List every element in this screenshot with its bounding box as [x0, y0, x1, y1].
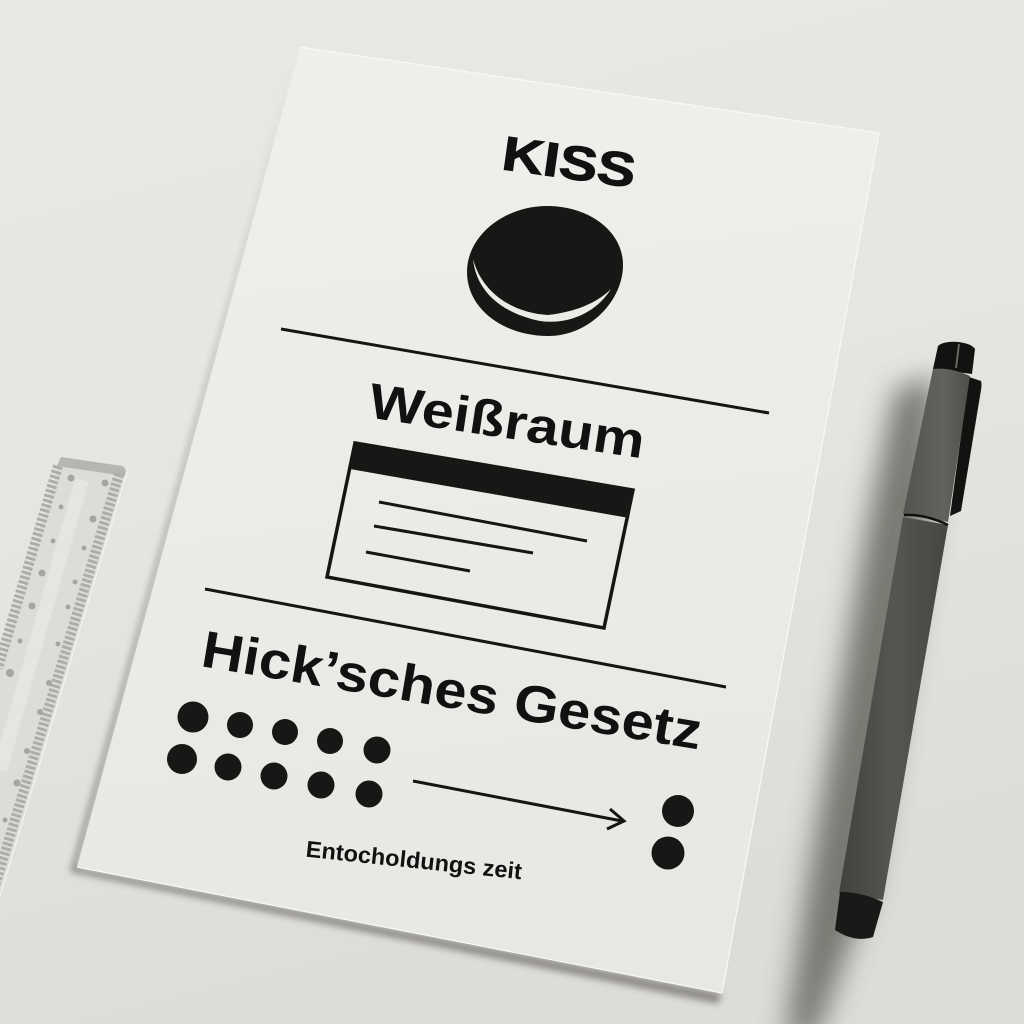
paper shadow: [70, 55, 722, 1004]
pen shadow: [785, 375, 935, 1024]
pen seam: [904, 515, 948, 525]
pen top cap: [933, 342, 975, 374]
chart: many choices dots: [167, 702, 390, 808]
pen cap body: [903, 369, 970, 522]
pen barrel: [839, 517, 948, 900]
caption: Entocholdungs zeit: Entocholdungs zeit: [305, 836, 524, 884]
icon: window with white space: [327, 443, 633, 628]
divider line 1: [281, 329, 769, 413]
arrow: decision time: [413, 781, 624, 829]
divider line 2: [205, 589, 726, 687]
pen clip: [950, 377, 982, 516]
chart: few choices dots: [652, 795, 694, 870]
panel: paper sheet: [77, 47, 879, 993]
pen tip: [835, 892, 883, 939]
ruler: [0, 457, 127, 896]
icon: round button: [467, 206, 623, 336]
heading: KISS: KISS: [499, 127, 639, 199]
heading: Weißraum: Weißraum: [365, 373, 649, 469]
pen: [835, 342, 982, 939]
heading: Hick'sches Gesetz: Hick’sches Gesetz: [198, 621, 706, 761]
